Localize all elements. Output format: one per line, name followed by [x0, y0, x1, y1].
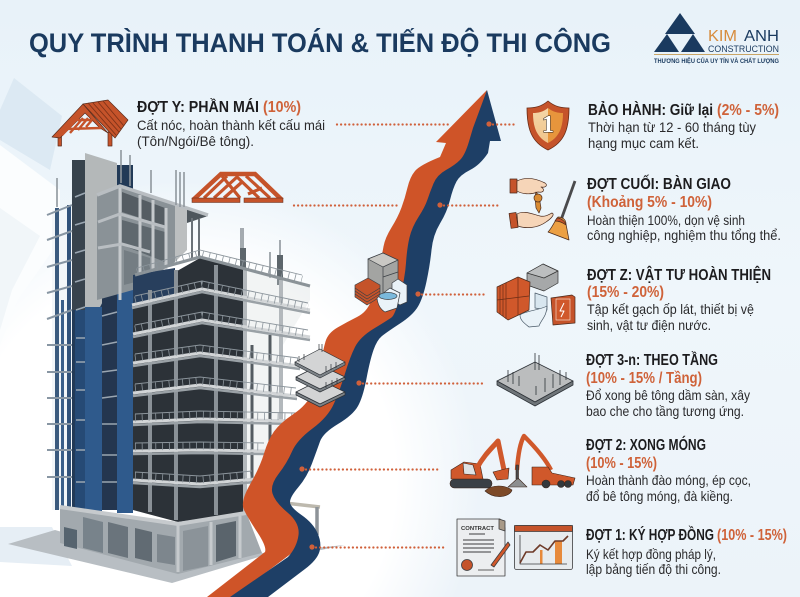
growth arrow ribbon	[207, 90, 501, 597]
connector dots	[294, 121, 516, 550]
text: Đợt 2: (10% - 15%)	[586, 455, 657, 472]
icon: progress chart	[514, 526, 572, 570]
text: Đợt 1	[586, 526, 787, 577]
left facade	[47, 153, 133, 513]
text: Đợt 3-n: (10% - 15% / Tầng)	[586, 370, 702, 387]
logo: Kim Anh Construction: KIM	[708, 28, 737, 45]
logo: Kim Anh Construction	[654, 13, 779, 65]
icon: materials on arrow	[355, 253, 407, 312]
text: Đợt Z: sinh, vật tư điện nước.	[587, 317, 711, 333]
text: Đợt Y: ĐỢT Y: PHẦN MÁI	[137, 99, 259, 116]
text: Đợt 3-n	[586, 352, 750, 419]
ground floor	[60, 503, 320, 574]
text: Đợt Y	[137, 99, 325, 149]
text: Đợt 2: đổ bê tông móng, đà kiềng.	[586, 488, 733, 504]
shield number: 1	[542, 112, 554, 138]
text: Đợt Y: (10%)	[263, 99, 301, 116]
text: Đợt 3-n: bao che cho tầng tương ứng.	[586, 403, 744, 419]
rebars	[57, 150, 280, 282]
slabs	[132, 250, 310, 487]
text: Đợt 1: ĐỢT 1: KÝ HỢP ĐỒNG	[586, 526, 714, 544]
orange band	[207, 90, 487, 597]
icon: excavators	[450, 436, 575, 497]
icon: contract	[457, 519, 510, 576]
icon: stacked floors on arrow	[295, 344, 345, 407]
text: Đợt cuối: công nghiệp, nghiệm thu tổng thể.	[587, 227, 781, 243]
text: Đợt Y: (Tôn/Ngói/Bê tông).	[137, 133, 254, 149]
text: Đợt Z: (15% - 20%)	[587, 284, 664, 301]
text: Đợt 3-n: ĐỢT 3-n: THEO TẦNG	[586, 352, 718, 369]
icon: floor slab	[497, 353, 573, 406]
ground plate	[8, 530, 345, 583]
text: Đợt cuối: (Khoảng 5% - 10%)	[587, 194, 712, 211]
text: Bảo hành: hạng mục cam kết.	[588, 135, 699, 151]
text: Đợt cuối	[587, 175, 781, 243]
text: Đợt Y: Cất nóc, hoàn thành kết cấu mái	[137, 117, 325, 133]
railings	[135, 250, 308, 476]
text: Bảo hành: (2% - 5%)	[717, 102, 779, 119]
text: Bảo hành: Thời hạn từ 12 - 60 tháng tùy	[588, 119, 756, 135]
text: Đợt Z: Tập kết gạch ốp lát, thiết bị vệ	[587, 301, 754, 317]
text: Đợt 2	[586, 436, 751, 504]
upper floors	[97, 186, 208, 300]
icon: warranty shield	[527, 101, 569, 150]
lower interior floors	[132, 250, 310, 522]
logo: Kim Anh Construction: CONSTRUCTION	[708, 44, 779, 54]
icon: roof truss	[192, 174, 283, 202]
text: Đợt Z: ĐỢT Z: VẬT TƯ HOÀN THIỆN	[587, 266, 771, 284]
title: QUY TRÌNH THANH TOÁN & TIẾN ĐỘ THI CÔNG	[29, 27, 611, 58]
text: Đợt 3-n: Đổ xong bê tông dầm sàn, xây	[586, 387, 750, 403]
navy band	[230, 90, 501, 597]
icon: contract: CONTRACT	[461, 526, 495, 532]
text: Đợt Z	[587, 266, 771, 333]
icon: roof with tiles	[52, 100, 128, 146]
logo: Kim Anh Construction: THƯƠNG HIỆU CỦA UY TÍN VÀ CHẤT LƯỢNG	[654, 55, 779, 65]
icon: finishing materials	[497, 264, 575, 327]
text: Đợt cuối: Hoàn thiện 100%, dọn vệ sinh	[587, 212, 745, 228]
text: Bảo hành: BẢO HÀNH: Giữ lại	[588, 102, 713, 119]
text: Đợt 2: Hoàn thành đào móng, ép cọc,	[586, 472, 751, 488]
building	[8, 150, 345, 583]
text: Đợt 1: lập bảng tiến độ thi công.	[586, 561, 721, 577]
text: Đợt cuối: ĐỢT CUỐI: BÀN GIAO	[587, 175, 731, 193]
icon: handover hands, key and broom	[509, 179, 575, 240]
text: Đợt 1: Ký kết hợp đồng pháp lý,	[586, 546, 716, 562]
logo: Kim Anh Construction: ANH	[744, 28, 779, 45]
text: Bảo hành	[588, 102, 779, 151]
text: Đợt 2: ĐỢT 2: XONG MÓNG	[586, 436, 706, 454]
